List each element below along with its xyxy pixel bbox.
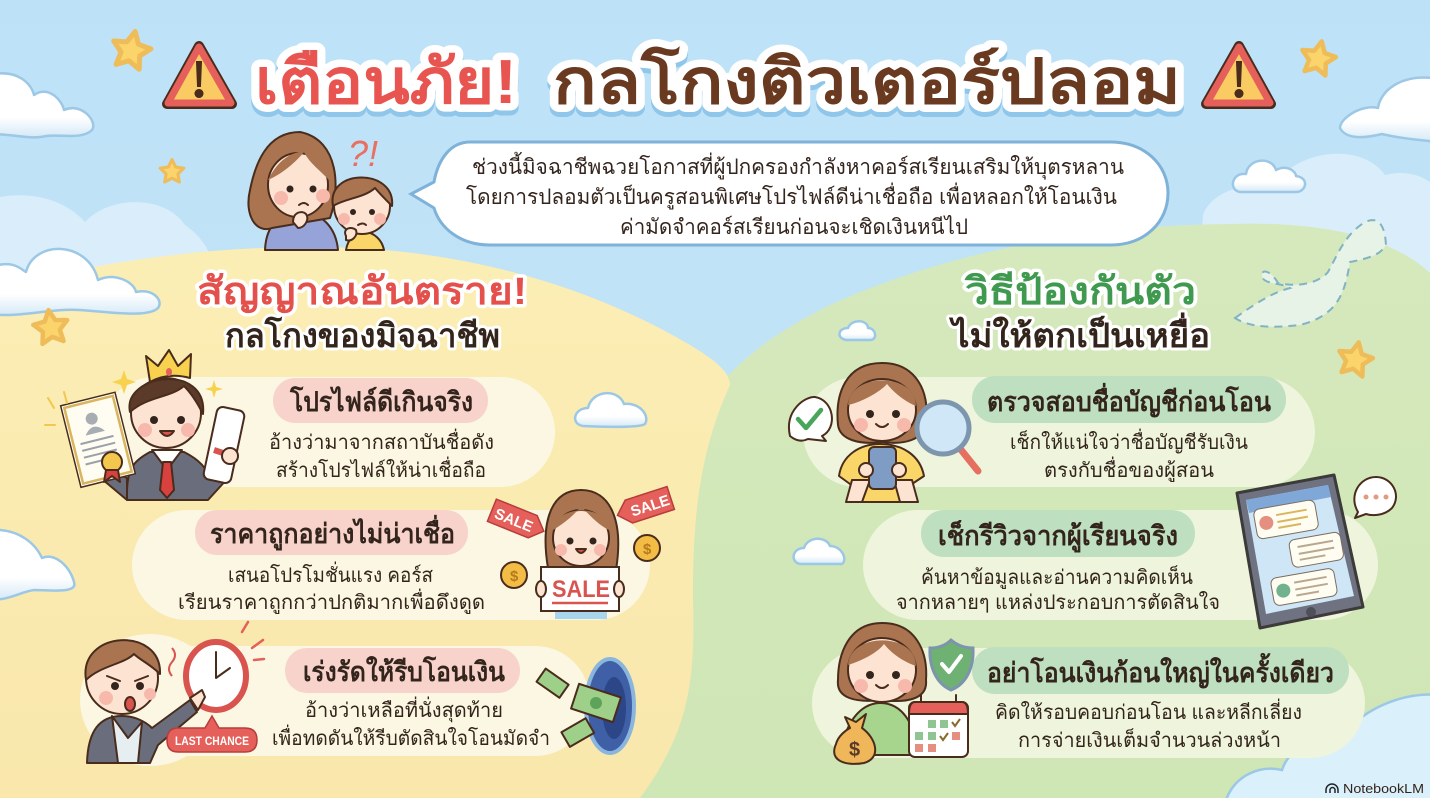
panel: cheap price card [132,487,674,620]
illustration: tablet with reviews [1237,475,1396,628]
small cloud on yellow panel [575,393,646,427]
text: profile description: อ้างว่ามาจากสถาบันชื่อดัง [269,428,494,454]
panel: fake profile card [45,350,555,500]
illustration: worried parent and child: ?! [348,133,378,174]
pale background cloud left [0,195,212,300]
yellow hill panel [0,247,730,798]
label: check account: ตรวจสอบชื่อบัญชีก่อนโอน [987,382,1271,418]
title: กลโกงติวเตอร์ปลอม [553,45,1181,117]
text: reviews description: จากหลายๆ แหล่งประกอบการตัดสินใจ [896,591,1220,614]
label: rush to transfer [285,648,520,693]
cloud bottom right [1226,694,1430,798]
cloud lower left [0,530,74,600]
illustration: girl with money bag, shield and calendar: $ [849,739,860,761]
label: rush to transfer: เร่งรัดให้รีบโอนเงิน [303,655,505,687]
text: rush description: อ้างว่าเหลือที่นั่งสุดท้าย [305,696,503,723]
panel: rush payment card [80,622,634,766]
illustration: girl with sale sign: SALE [492,505,535,536]
cloud top left [0,73,93,137]
illustration: girl with sale sign: $ [510,568,519,585]
illustration: money going into portal [537,659,634,753]
star 2 [160,160,184,182]
dashed paper plane trail [1235,220,1386,327]
text: lump sum description: คิดให้รอบคอบก่อนโอน และหลีกเลี่ยง [995,698,1302,724]
panel: check reviews card [863,475,1396,628]
text: price description [178,561,485,615]
speech bubble intro: โดยการปลอมตัวเป็นครูสอนพิเศษโปรไฟล์ดีน่าเชื่อถือ เพื่อหลอกให้โอนเงิน [466,182,1117,210]
text: reviews description [896,564,1220,614]
text: account description: เช็กให้แน่ใจว่าชื่อบัญชีรับเงิน [1010,428,1248,454]
cloud mid left [0,249,160,315]
pale background cloud right [1200,154,1430,300]
green hill panel [640,224,1430,798]
small cloud on green panel 1 [839,321,875,340]
text: lump sum description [995,698,1302,752]
text: lump sum description: การจ่ายเงินเต็มจำนวนล่วงหน้า [1018,727,1281,752]
icon: warning triangle left [167,46,232,104]
heading: how to protect [949,271,1210,354]
heading: how to protect: ไม่ให้ตกเป็นเหยื่อ [949,312,1210,354]
label: too good profile: โปรไฟล์ดีเกินจริง [289,385,473,417]
label: no lump sum [972,647,1349,694]
text: profile description [269,428,494,482]
label: too good profile [273,378,488,423]
text: reviews description: ค้นหาข้อมูลและอ่านความคิดเห็น [921,564,1193,590]
heading: danger signs [197,271,527,354]
speech bubble intro: ค่ามัดจำคอร์สเรียนก่อนจะเชิดเงินหนีไป [620,215,968,239]
text: profile description: สร้างโปรไฟล์ให้น่าเชื่อถือ [276,456,486,482]
label: no lump sum: อย่าโอนเงินก้อนใหญ่ในครั้งเดียว [987,652,1334,689]
illustration: worried parent and child [248,132,392,250]
illustration: girl with money bag, shield and calendar [834,623,973,764]
title: เตือนภัย! [255,48,517,117]
text: account description [1010,428,1248,483]
label: check reviews: เช็กรีวิวจากผู้เรียนจริง [938,518,1178,553]
label: unbelievably cheap: ราคาถูกอย่างไม่น่าเชื่อ [210,514,455,551]
icon: warning triangle right [1206,46,1271,104]
heading: danger signs: สัญญาณอันตราย! [197,271,527,313]
panel: avoid lump sum card [812,623,1365,764]
star 3 [32,308,70,345]
illustration: man with crown and certificate [45,350,245,500]
star 4 [1298,38,1338,77]
speech bubble intro: ช่วงนี้มิจฉาชีพฉวยโอกาสที่ผู้ปกครองกำลังหาคอร์สเรียนเสริมให้บุตรหลาน [472,152,1124,180]
star 5 [1335,339,1375,378]
small cloud on green panel 2 [794,539,844,564]
illustration: girl with sale sign: $ [643,541,652,558]
illustration: man pointing at clock [85,622,264,763]
text: rush description: เพื่อทดดันให้รีบตัดสินใจโอนมัดจำ [272,724,550,750]
heading: danger signs: กลโกงของมิจฉาชีพ [225,316,500,354]
text: price description: เสนอโปรโมชั่นแรง คอร์ส [228,561,433,587]
illustration: girl with phone and magnifier [789,363,978,502]
panel: check account name card [789,363,1315,502]
text: rush description [272,696,550,750]
label: check reviews [921,510,1195,557]
illustration: girl with sale sign: SALE [629,492,672,520]
illustration: man pointing at clock: LAST CHANCE [175,734,249,748]
illustration: girl with sale sign: SALE [552,576,610,603]
NotebookLM watermark: NotebookLM [1343,781,1424,796]
cloud top right [1340,78,1430,142]
speech bubble intro [411,142,1168,245]
title [255,45,1181,117]
text: price description: เรียนราคาถูกกว่าปกติมากเพื่อดึงดูด [178,588,485,615]
text: account description: ตรงกับชื่อของผู้สอน [1044,456,1214,483]
illustration: girl with sale sign [487,487,674,619]
heading: how to protect: วิธีป้องกันตัว [964,271,1196,313]
label: unbelievably cheap [195,510,468,555]
star 1 [109,27,154,71]
small cloud header right [1233,161,1305,192]
label: check account [972,376,1286,423]
